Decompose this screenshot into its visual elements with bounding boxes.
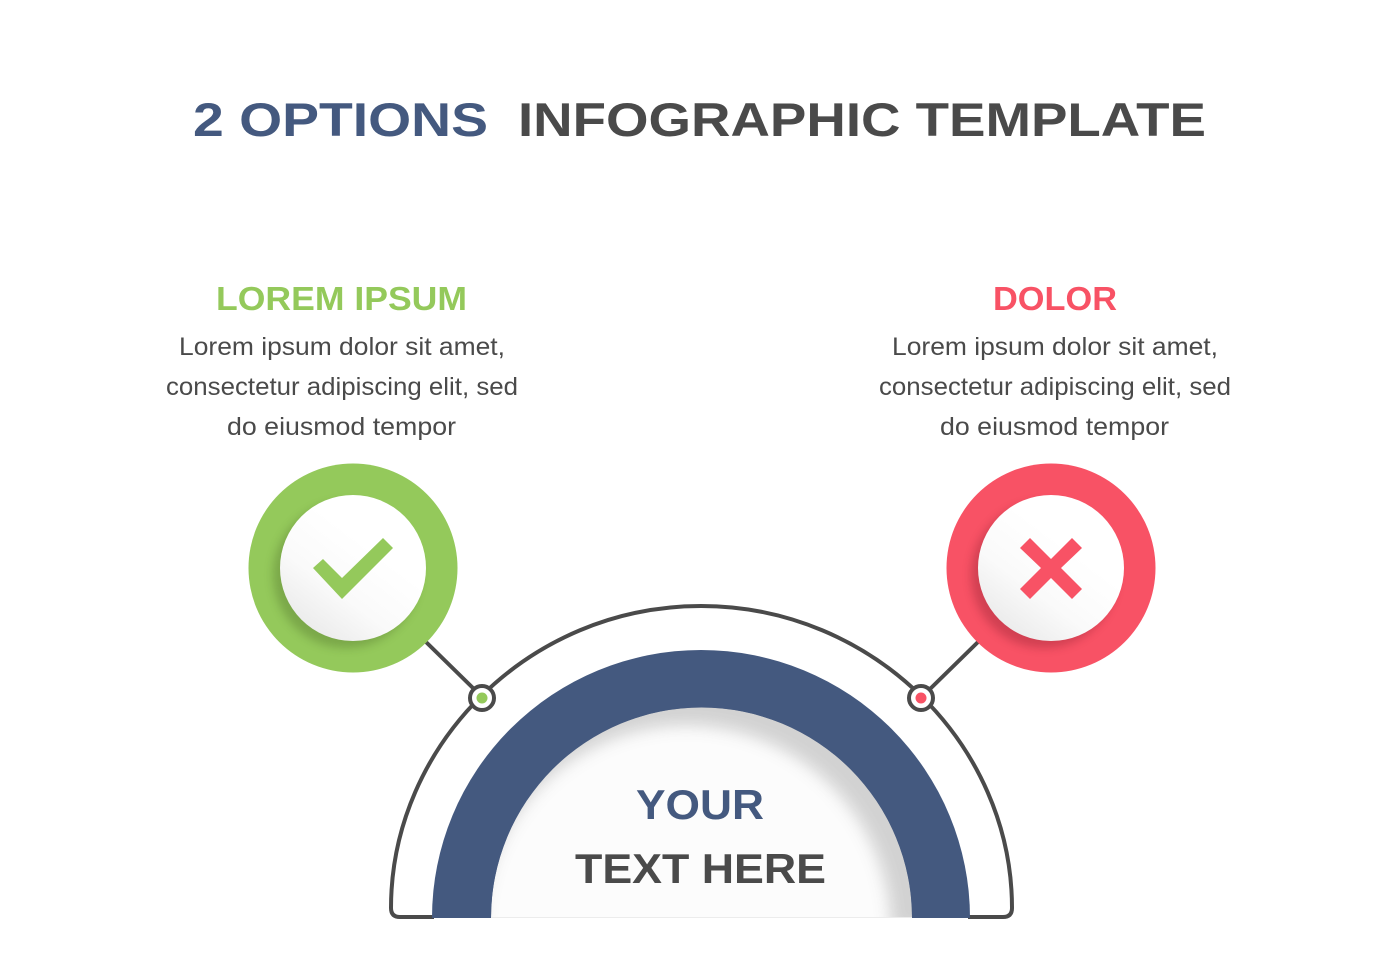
blue semicircle band: [432, 650, 970, 918]
center text: [575, 781, 826, 892]
text block: right description: Lorem ipsum dolor sit amet,: [892, 333, 1218, 361]
text block: left description: Lorem ipsum dolor sit amet,: [179, 333, 505, 361]
icon: check mark: [313, 538, 393, 599]
node: red: [909, 686, 933, 710]
text block: right description: do eiusmod tempor: [940, 413, 1169, 441]
panel: left option text: [166, 280, 518, 441]
title: [193, 93, 1206, 146]
icon: cross mark: [1020, 538, 1082, 599]
center text: text here: TEXT HERE: [575, 845, 826, 892]
icon: green check circle: [248, 464, 458, 672]
title: 2 options: 2 OPTIONS: [193, 93, 488, 146]
text block: right description: [879, 333, 1231, 441]
icon: red cross circle: [946, 464, 1156, 672]
text block: left description: [166, 333, 518, 441]
center text: your: YOUR: [636, 781, 764, 828]
text block: left description: do eiusmod tempor: [227, 413, 456, 441]
heading: dolor: DOLOR: [993, 280, 1117, 317]
panel: right option text: [879, 280, 1231, 441]
title: infographic template: INFOGRAPHIC TEMPLATE: [518, 93, 1206, 146]
connector: green circle to arc: [426, 642, 475, 690]
node: green: [470, 686, 494, 710]
arc outline: [391, 606, 1012, 917]
connector: red circle to arc: [930, 642, 978, 689]
text block: left description: consectetur adipiscing elit, sed: [166, 373, 518, 401]
inner semicircle: [491, 708, 912, 918]
text block: right description: consectetur adipiscing elit, sed: [879, 373, 1231, 401]
heading: lorem ipsum: LOREM IPSUM: [216, 280, 467, 317]
